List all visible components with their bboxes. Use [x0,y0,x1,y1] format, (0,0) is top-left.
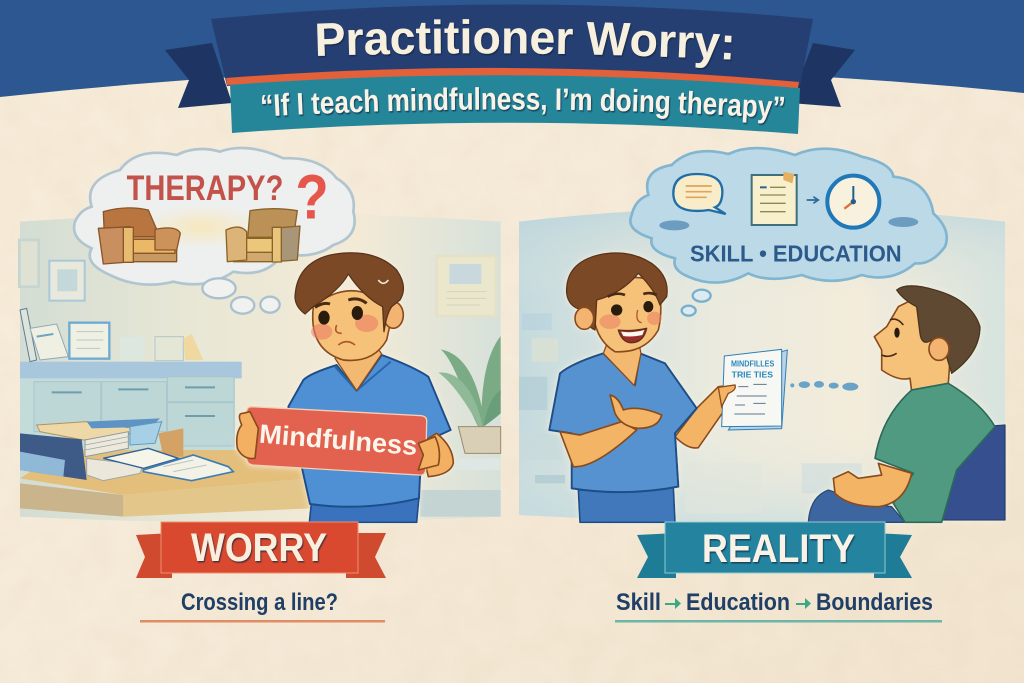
bubble shape [630,148,947,283]
icon: clock [827,176,879,228]
glow between chairs [138,205,265,248]
shirt [549,353,697,492]
ear [929,338,949,360]
teeth [621,330,644,336]
reality caption: Skill [616,589,661,616]
chair right [226,209,300,262]
icon: small arrow [807,197,818,203]
pants [309,497,419,522]
icon: document [752,172,797,225]
therapy label: THERAPY? [127,169,283,208]
hand right [418,437,439,470]
wall frames [19,240,496,316]
face [313,291,393,360]
ribbon band [161,522,358,573]
smiling mouth [618,328,647,343]
worried practitioner [237,253,453,522]
mindfulness sign: Mindfulness [258,419,418,461]
orange rule [226,68,799,88]
background clinic shapes [519,313,862,513]
ribbon tail right [790,43,855,107]
hair [567,253,667,330]
reality caption [616,589,933,616]
worry caption: Crossing a line? [181,589,338,616]
thought trail [682,290,711,316]
arrow [796,598,811,609]
handout: TRIE TIES [732,369,773,379]
shirt [875,383,995,522]
arm reaching [675,385,735,448]
nose [637,310,642,323]
reality ribbon [637,522,912,578]
worry label: WORRY [191,526,327,570]
plant [420,336,501,517]
nose and mouth [336,325,355,345]
face details [882,319,903,356]
skill education label: SKILL • EDUCATION [690,241,902,267]
ribbon tails [136,533,386,578]
eyebrows [608,293,657,297]
ear [575,307,594,329]
cabinet and counter [20,362,242,453]
mindfulness sign [247,407,427,475]
eyebrows [315,299,367,307]
background tint [519,207,1005,522]
reality caption: Education [686,589,790,616]
bubble shape [74,148,355,285]
scene background [20,213,501,522]
hair [295,253,403,332]
arm lower [560,422,637,467]
subtitle banner [230,73,800,134]
handout [718,349,787,430]
seated listener [808,286,1005,522]
scene background [519,207,1005,522]
subtitle text: “If I teach mindfulness, I’m doing therapy” [262,87,786,126]
blush [599,314,621,329]
arm [833,463,912,507]
thought bubble: therapy [74,148,355,285]
reality underline [615,620,942,622]
handout: MINDFILLES [731,359,775,369]
icon: speech bubble [673,174,726,214]
ribbon tail left [165,43,232,108]
desk [20,428,310,517]
jeans [808,490,905,522]
gesturing hand [610,395,662,428]
collar [335,362,391,391]
hand left [237,412,258,459]
pants [578,487,675,522]
hair highlight [378,280,388,283]
arrow [665,598,681,609]
reality caption: Boundaries [816,589,933,616]
worry ribbon [136,522,386,578]
eye [894,328,900,338]
blush [311,324,332,340]
eyes [318,311,330,325]
panel: reality scene [519,148,1005,522]
title banner [211,4,813,86]
neck [603,340,641,386]
panel: worry scene [19,148,501,522]
title ribbon [165,4,855,134]
thought bubble: skill and education [630,148,947,283]
ribbon band [665,522,885,573]
thought trail [202,278,280,314]
dotted speech trail [790,381,858,391]
question mark: ? [295,163,329,233]
eyes [611,304,622,316]
chair left [98,208,180,264]
title text: Practitioner Worry: [317,19,733,70]
chair [940,425,1005,520]
arm right [420,433,453,477]
neck and head [874,293,952,392]
neck [335,347,382,391]
cloud smudges [659,217,918,230]
reality label: REALITY [702,527,855,571]
speaking practitioner [549,253,735,522]
ear [383,302,403,328]
blue header background [0,0,1024,97]
paper piles and binder [20,418,233,481]
ribbon tails [637,533,912,578]
worry underline [140,620,385,622]
shirt [288,355,451,507]
hair [897,286,980,373]
face [593,277,661,352]
shelf binders and folders [20,308,203,362]
